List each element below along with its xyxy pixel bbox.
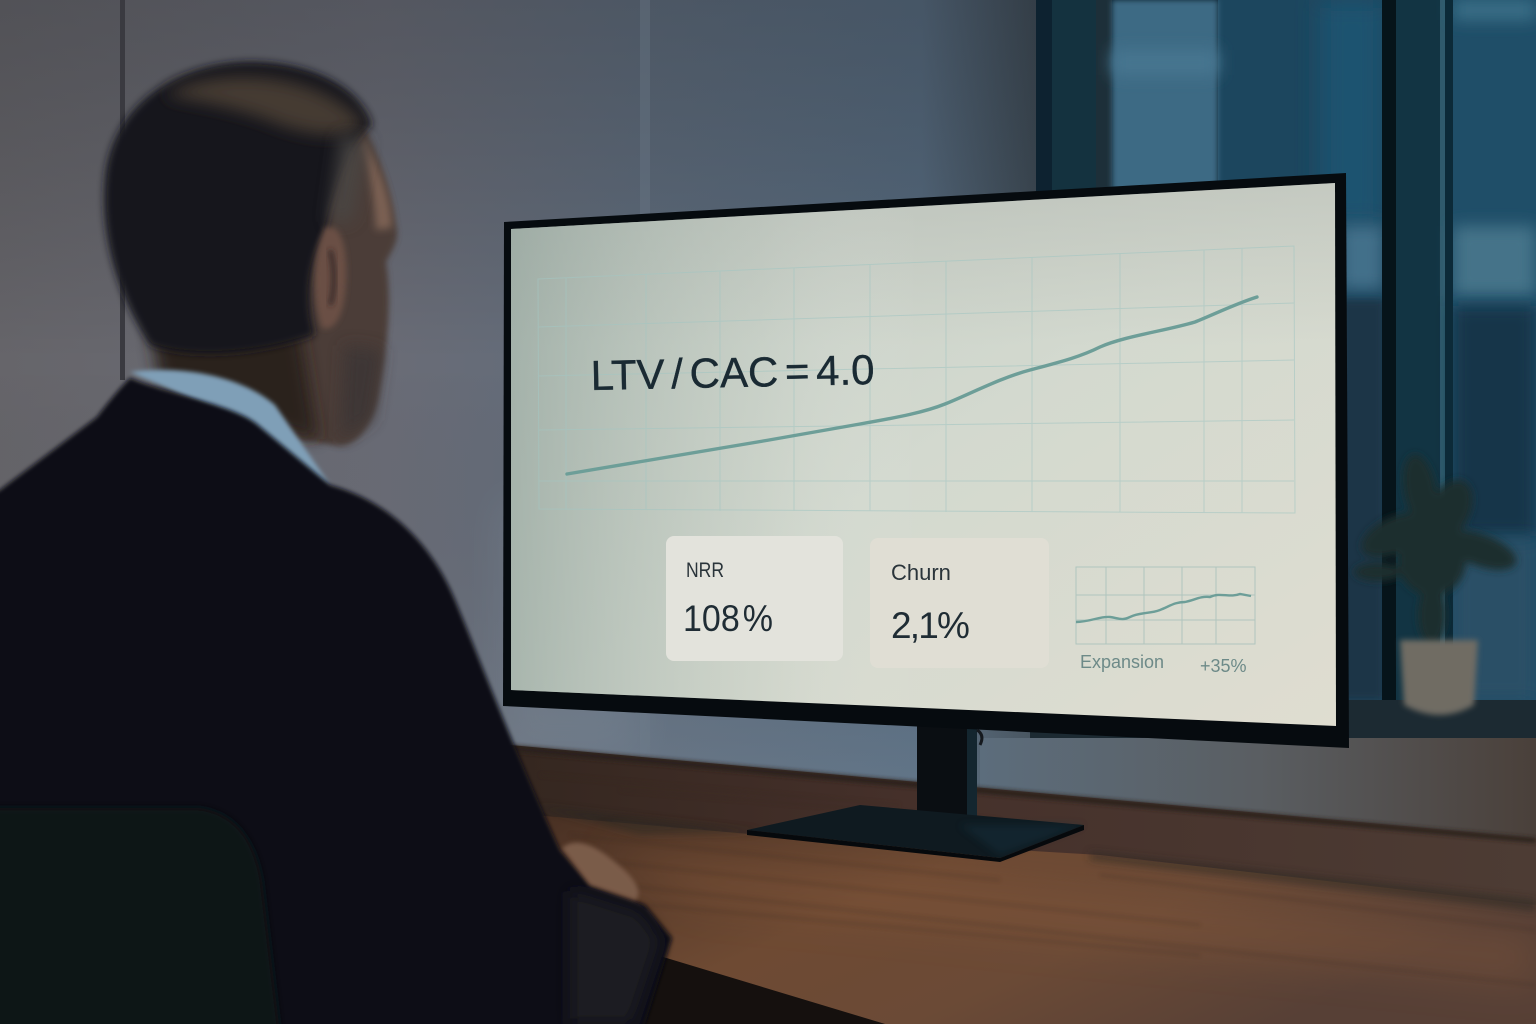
beard shadow xyxy=(340,345,382,440)
chair back xyxy=(0,808,280,1024)
cable xyxy=(977,730,982,745)
card: Churn: Churn xyxy=(891,560,951,585)
card: NRR xyxy=(666,536,843,661)
desk xyxy=(480,745,1536,1024)
temple grey xyxy=(328,135,368,222)
hand xyxy=(562,843,638,900)
screen xyxy=(511,183,1336,726)
card: Churn xyxy=(870,538,1049,668)
window with blurred building xyxy=(980,0,1536,838)
headline metric: LTV / CAC = 4.0 xyxy=(590,346,875,399)
line chart panel xyxy=(538,246,1295,513)
head and neck xyxy=(104,62,397,446)
chart grid xyxy=(538,246,1295,513)
hair highlight xyxy=(165,77,365,134)
sleeve highlight xyxy=(570,890,660,1024)
card: NRR: 108 % xyxy=(683,598,773,639)
card: NRR: NRR xyxy=(686,559,724,582)
plant on window sill xyxy=(1354,452,1521,715)
card: Churn: 2,1% xyxy=(891,605,969,646)
face and neck skin xyxy=(180,110,397,446)
mini chart: expansion xyxy=(1076,567,1255,644)
neck shadow xyxy=(150,330,318,440)
ear xyxy=(315,227,346,329)
monitor xyxy=(503,173,1349,748)
hair xyxy=(104,62,372,354)
desk front edge shadow xyxy=(600,950,885,1024)
forehead highlight xyxy=(360,135,392,230)
monitor stand xyxy=(747,715,1084,862)
expansion label: Expansion xyxy=(1080,652,1164,672)
suit jacket xyxy=(0,378,672,1024)
person seen from behind xyxy=(0,62,672,1024)
expansion value: +35% xyxy=(1200,656,1247,676)
shirt collar xyxy=(130,370,330,485)
monitor bezel xyxy=(503,173,1349,748)
trend line xyxy=(567,297,1257,474)
